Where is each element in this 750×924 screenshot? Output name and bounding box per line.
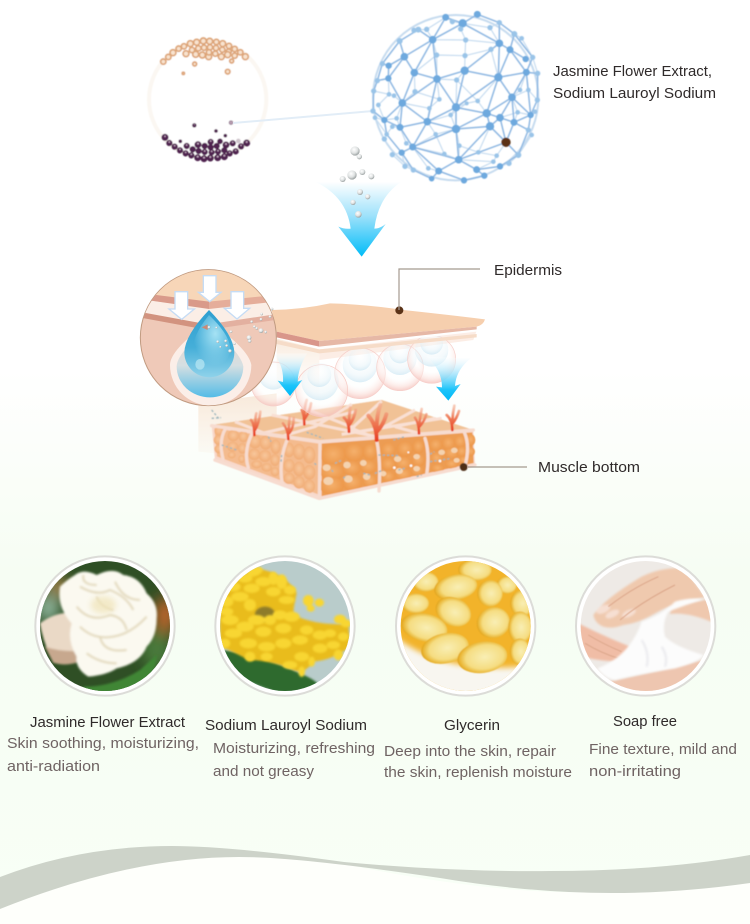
footer wave	[0, 846, 750, 924]
muscle block	[212, 400, 475, 500]
ingredient text: jasmine flower extract	[7, 714, 199, 775]
marker dot: epidermis	[395, 306, 403, 314]
moisture droplets	[251, 332, 456, 406]
white flecks	[393, 451, 441, 469]
label: ingredients of the sphere	[553, 63, 716, 102]
top surface grid	[235, 401, 442, 440]
pale cell nuclei	[323, 448, 460, 485]
molecular network sphere	[371, 11, 540, 183]
tan beads	[161, 38, 248, 74]
upper skin tone	[156, 270, 262, 302]
top surface	[212, 400, 473, 442]
flower bloom	[59, 571, 157, 677]
ingredient text: glycerin: Deep into the skin, repair	[384, 743, 556, 760]
left bubble with ingredient beads	[149, 38, 266, 162]
ingredient text: soap free: Fine texture, mild and	[589, 741, 737, 758]
small nodes	[371, 19, 540, 172]
ingredient text: jasmine flower extract: Jasmine Flower Extract	[30, 714, 186, 731]
large nodes	[382, 11, 533, 183]
ingredient text: glycerin: Glycerin	[444, 717, 500, 734]
finger creases	[585, 577, 675, 658]
ingredient text: glycerin: the skin, replenish moisture	[384, 764, 572, 781]
ingredient text: soap free: non-irritating	[589, 763, 681, 780]
finger nails	[596, 604, 611, 614]
skin bands	[152, 295, 209, 309]
membrane straps	[212, 426, 475, 498]
arrows: pressing in	[169, 276, 250, 319]
droplet core	[184, 310, 234, 377]
ingredient photo: yellow flowers	[215, 556, 357, 697]
ingredient text: soap free	[589, 713, 737, 780]
droplets over muscle	[274, 353, 471, 417]
arrow: left small blue	[274, 353, 307, 396]
upper fingers	[593, 568, 705, 628]
particles	[340, 146, 374, 218]
flower shading	[77, 575, 147, 663]
pale rear mesh	[374, 17, 538, 171]
callout: epidermis	[399, 262, 562, 310]
connector line from bubble to sphere	[233, 110, 373, 124]
water particles on cells	[212, 410, 452, 478]
lower hand	[578, 623, 630, 662]
hand back	[670, 599, 710, 622]
front mesh	[373, 14, 538, 180]
left face cells	[214, 426, 315, 493]
block base	[212, 400, 475, 500]
ingredient text: sodium lauroyl sodium	[205, 717, 375, 780]
bubbles in magnified circle	[208, 308, 273, 353]
label: ingredients of the sphere: Jasmine Flower Extract,	[553, 63, 712, 80]
rear shadow panel	[198, 393, 277, 460]
ingredient text: jasmine flower extract: Skin soothing, moisturizing,	[7, 735, 199, 752]
central column	[277, 337, 319, 407]
flower tube	[40, 612, 75, 653]
ingredient text: glycerin	[384, 717, 572, 781]
ingredient photo: glycerin capsules	[395, 556, 538, 697]
left face backing	[214, 428, 318, 494]
ingredient photo: jasmine flower	[33, 556, 177, 697]
ingredient text: sodium lauroyl sodium: and not greasy	[213, 763, 314, 780]
arrow: right small blue	[427, 357, 471, 401]
bead highlights	[164, 124, 248, 159]
falling particles and big down arrow	[315, 146, 402, 257]
droplet halo	[170, 338, 252, 406]
foam	[598, 599, 703, 680]
skin layers diagram	[198, 303, 485, 460]
right face backing	[322, 432, 474, 496]
ingredient text: sodium lauroyl sodium: Moisturizing, refreshing	[213, 740, 375, 757]
right face cells	[320, 434, 475, 495]
marker dot: muscle	[460, 463, 468, 471]
callout: epidermis: Epidermis	[494, 262, 562, 279]
forearm	[610, 660, 701, 691]
arrow: down	[315, 182, 402, 257]
capillaries	[251, 400, 459, 440]
white gap layer	[145, 300, 272, 322]
callout: muscle bottom: Muscle bottom	[538, 459, 640, 476]
marker dot	[501, 138, 511, 147]
ingredient text: soap free: Soap free	[613, 713, 677, 730]
purple beads	[162, 123, 250, 162]
ingredient photo: soap free foam on hands	[575, 556, 718, 697]
epidermis top layer	[272, 303, 485, 353]
label: ingredients of the sphere: Sodium Lauroyl Sodium	[553, 85, 716, 102]
yellow blossom mass	[220, 568, 350, 671]
ingredient text: jasmine flower extract: anti-radiation	[7, 758, 100, 775]
ingredient text: sodium lauroyl sodium: Sodium Lauroyl Sodium	[205, 717, 367, 734]
magnified skin penetration circle	[135, 265, 282, 406]
